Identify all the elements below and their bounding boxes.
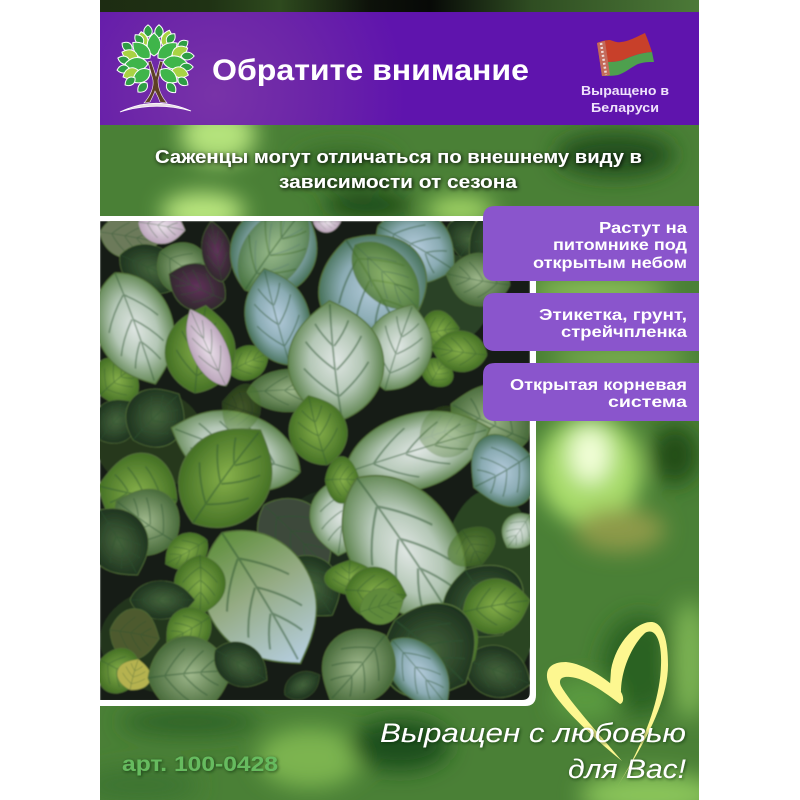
panel: grown in nursery: питомнике под	[553, 237, 687, 254]
panel: open root system: Открытая корневая	[510, 377, 687, 394]
panel: open root system	[483, 363, 699, 421]
icon: Belarus flag	[597, 33, 654, 76]
icon: yellow heart	[547, 622, 668, 787]
flag caption	[581, 83, 669, 115]
subtitle: зависимости от сезона	[279, 172, 518, 192]
flag caption: Беларуси	[591, 100, 659, 115]
panel: label, soil, film: стрейчпленка	[561, 324, 687, 341]
slogan: Выращен с любовью	[380, 718, 686, 748]
panel: label, soil, film	[483, 293, 699, 351]
panel: label, soil, film: Этикетка, грунт,	[539, 307, 687, 324]
panel: grown in nursery: открытым небом	[533, 255, 687, 272]
flag caption: Выращено в	[581, 83, 669, 98]
blurred green background	[80, 0, 720, 800]
photo: mint leaves	[100, 221, 530, 700]
lower leaves	[470, 434, 530, 508]
header band	[100, 12, 699, 125]
panel: grown in nursery	[483, 206, 699, 281]
panel: grown in nursery: Растут на	[599, 220, 687, 237]
photo frame	[100, 216, 536, 706]
subtitle	[155, 147, 642, 192]
title: Обратите внимание	[212, 54, 529, 87]
logo: tree	[116, 25, 194, 112]
article number: арт. 100-0428	[122, 753, 278, 776]
slogan	[380, 718, 687, 784]
panel: open root system: система	[608, 394, 687, 411]
subtitle: Саженцы могут отличаться по внешнему виду в	[155, 147, 642, 167]
slogan: для Вас!	[568, 754, 687, 784]
back leaves	[446, 221, 478, 258]
